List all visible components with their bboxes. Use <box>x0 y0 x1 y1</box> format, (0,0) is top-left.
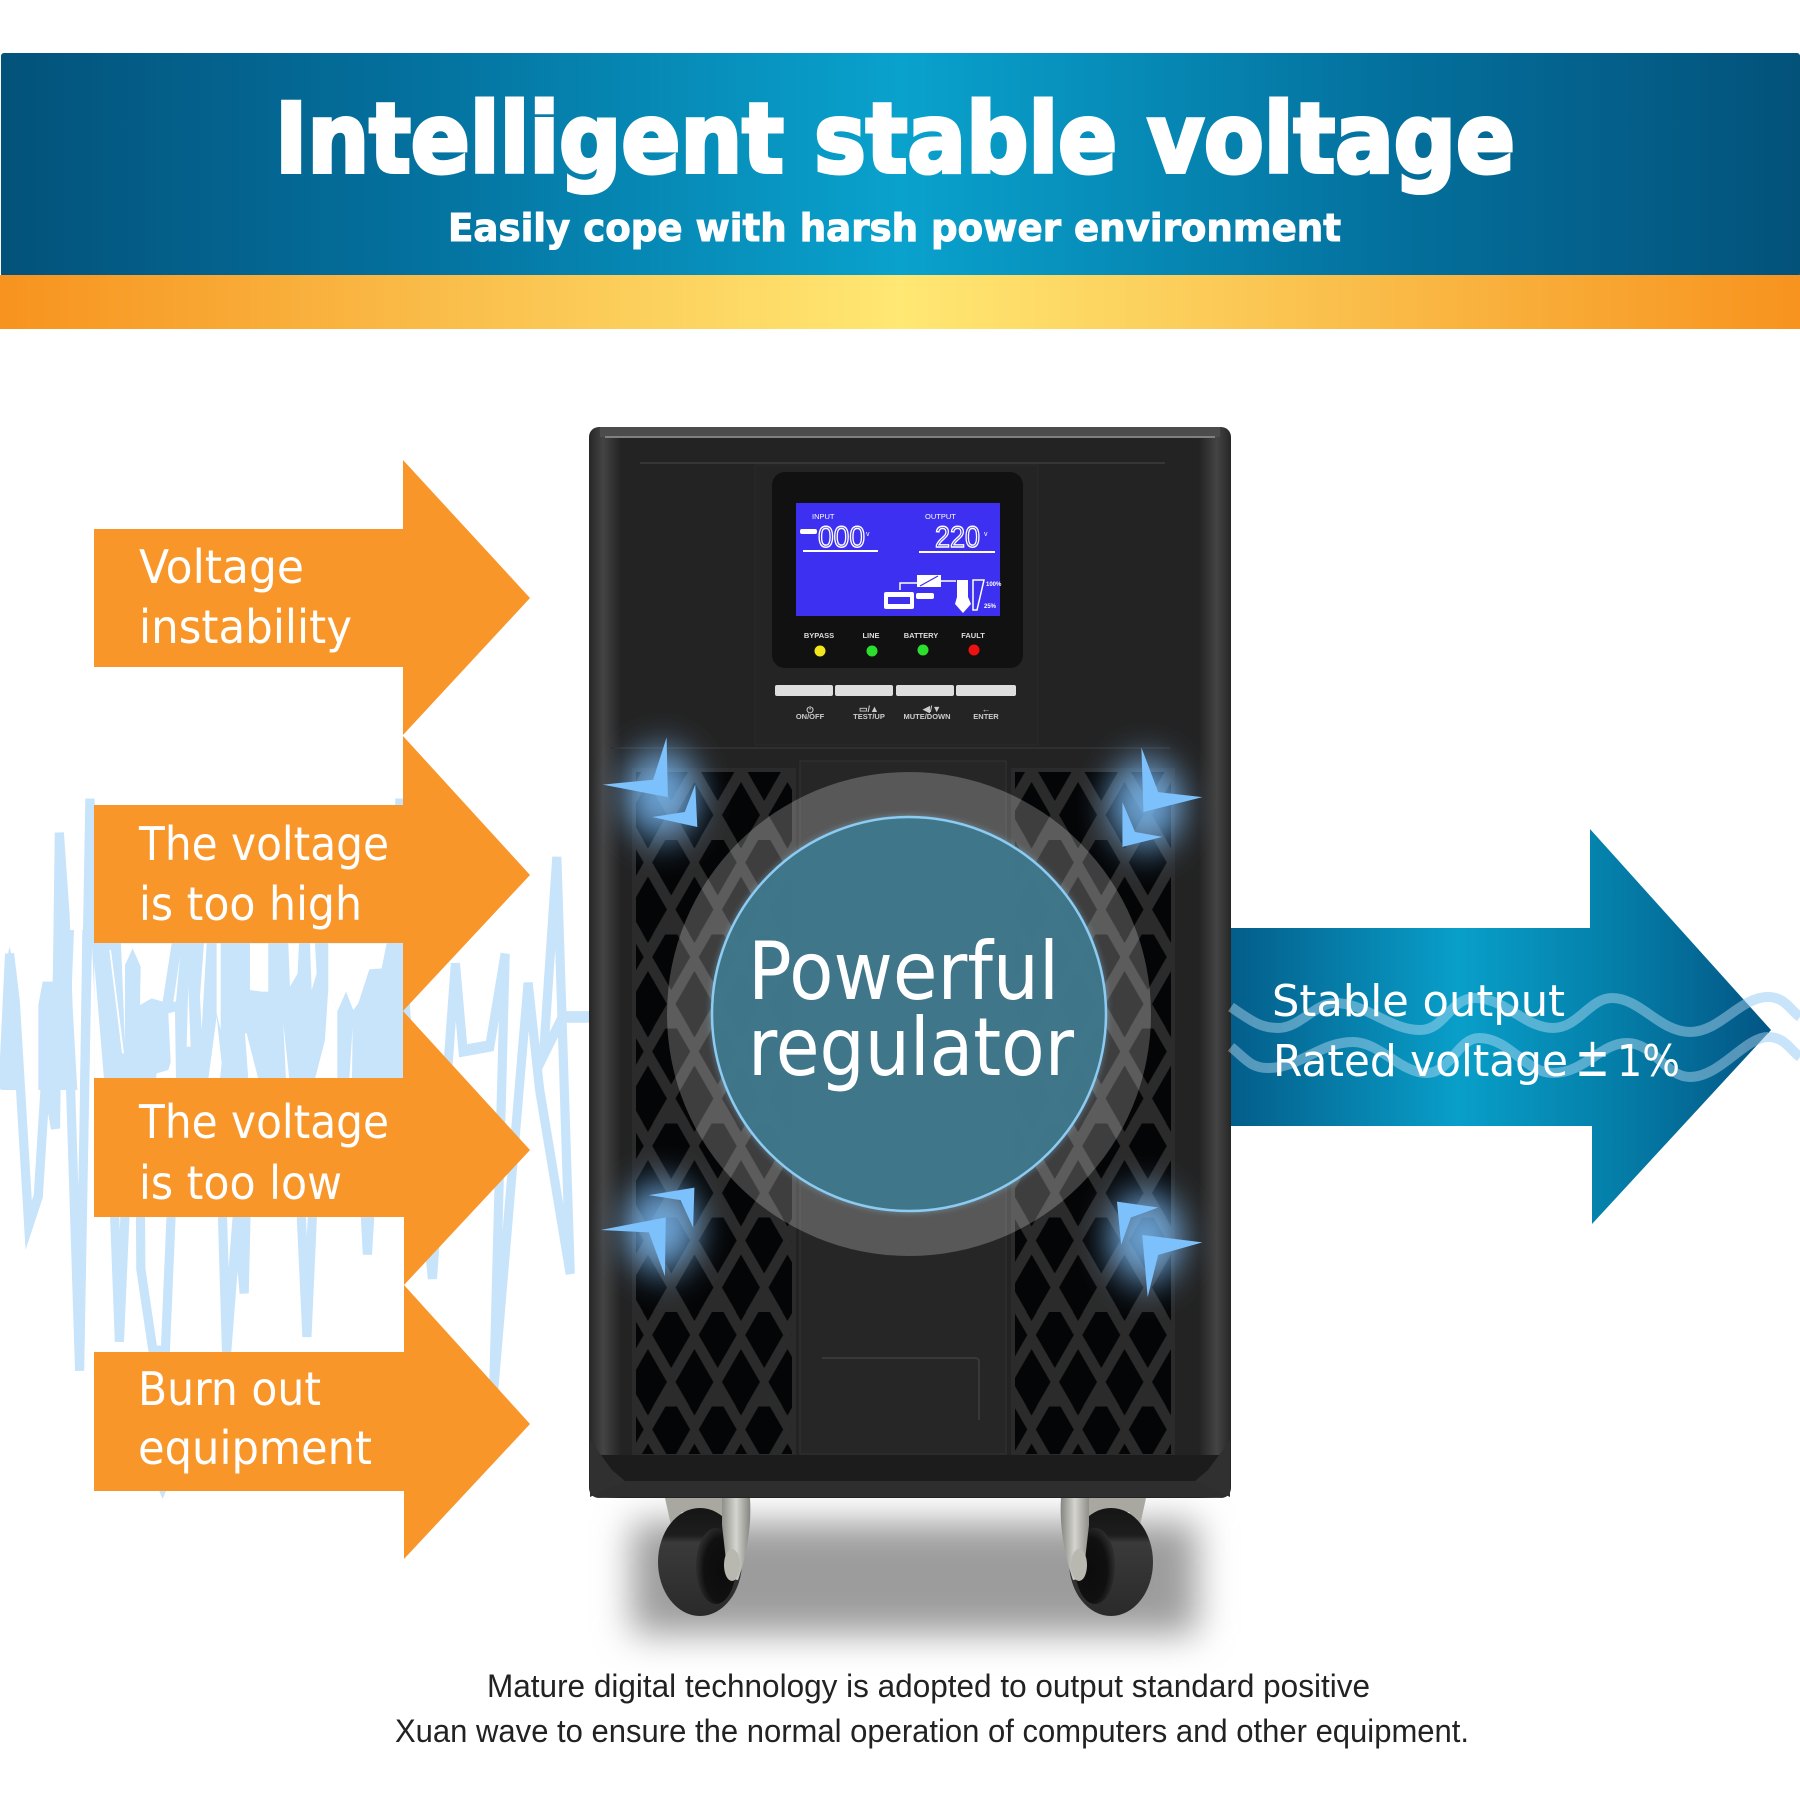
floor shadow <box>632 1522 1197 1634</box>
LCD control panel <box>772 472 1023 721</box>
button labels: ◀/▼ <box>922 704 941 714</box>
UPS cabinet <box>589 427 1231 1498</box>
footer description: Mature digital technology is adopted to output standard positive <box>487 1668 1370 1704</box>
footer description <box>395 1668 1469 1749</box>
LCD screen: OUTPUT <box>925 512 956 521</box>
arrow: the voltage is too low: The voltage <box>138 1095 389 1149</box>
cabinet base <box>590 1440 1230 1497</box>
arrow: the voltage is too high: The voltage <box>138 817 389 871</box>
arrow: the voltage is too low <box>94 1011 530 1285</box>
LCD screen: 100% <box>986 582 1002 588</box>
arrow: burn out equipment: Burn out <box>138 1362 321 1416</box>
regulator circle <box>667 772 1151 1256</box>
arrow: burn out equipment <box>94 1285 530 1559</box>
left caster wheel <box>658 1498 750 1616</box>
output label: Stable output <box>1272 976 1565 1027</box>
status indicators <box>804 631 985 656</box>
unstable voltage waveform <box>2 799 589 1499</box>
arrow: voltage instability <box>94 460 530 735</box>
jagged trace <box>3 799 589 1499</box>
status indicators: FAULT <box>961 631 985 640</box>
button labels: TEST/UP <box>853 712 885 721</box>
output label: Rated voltage <box>1273 1036 1568 1087</box>
LCD screen: 25% <box>984 604 997 610</box>
output label: ± <box>1575 1026 1610 1089</box>
button labels: ← <box>982 704 990 714</box>
button labels: ENTER <box>973 712 999 721</box>
stable sine waves <box>1231 997 1768 1077</box>
button labels: ▭/▲ <box>859 704 879 714</box>
output label <box>1272 976 1680 1089</box>
dense trace band <box>2 930 403 1090</box>
airflow sparks <box>601 737 1202 1297</box>
LCD screen: INPUT <box>812 512 835 521</box>
footer description: Xuan wave to ensure the normal operation of computers and other equipment. <box>395 1713 1469 1749</box>
circle label: Powerful <box>748 925 1059 1018</box>
button labels <box>796 704 999 721</box>
subtitle: Easily cope with harsh power environment <box>448 206 1341 250</box>
arrow: voltage instability: instability <box>139 600 352 654</box>
arrow: stable output <box>1231 829 1771 1224</box>
arrow: the voltage is too high: is too high <box>139 877 362 931</box>
status indicators: BYPASS <box>804 631 834 640</box>
ventilation grille left <box>632 768 796 1456</box>
LCD screen: 220 <box>935 521 980 554</box>
wave tails right of output arrow <box>1690 997 1800 1077</box>
button labels: ON/OFF <box>796 712 825 721</box>
centre door panel <box>800 761 1006 1454</box>
header banner <box>0 53 1800 329</box>
status indicators: BATTERY <box>904 631 938 640</box>
right caster wheel <box>1061 1498 1153 1616</box>
arrow: voltage instability: Voltage <box>139 540 304 594</box>
LCD screen: 000 <box>818 521 865 554</box>
button labels: MUTE/DOWN <box>903 712 951 721</box>
LCD screen: v <box>984 531 988 538</box>
arrow: the voltage is too low: is too low <box>139 1156 342 1210</box>
circle label: regulator <box>748 1001 1074 1094</box>
title: Intelligent stable voltage <box>275 83 1515 195</box>
button labels: ⏻ <box>806 705 814 715</box>
arrow: burn out equipment: equipment <box>138 1421 372 1475</box>
ventilation grille right <box>1011 768 1175 1456</box>
control buttons <box>775 685 1016 696</box>
LCD screen <box>796 503 1002 616</box>
status indicators: LINE <box>862 631 880 640</box>
arrow: the voltage is too high <box>94 736 530 1011</box>
LCD screen: v <box>866 531 870 538</box>
output label: 1% <box>1617 1036 1680 1087</box>
